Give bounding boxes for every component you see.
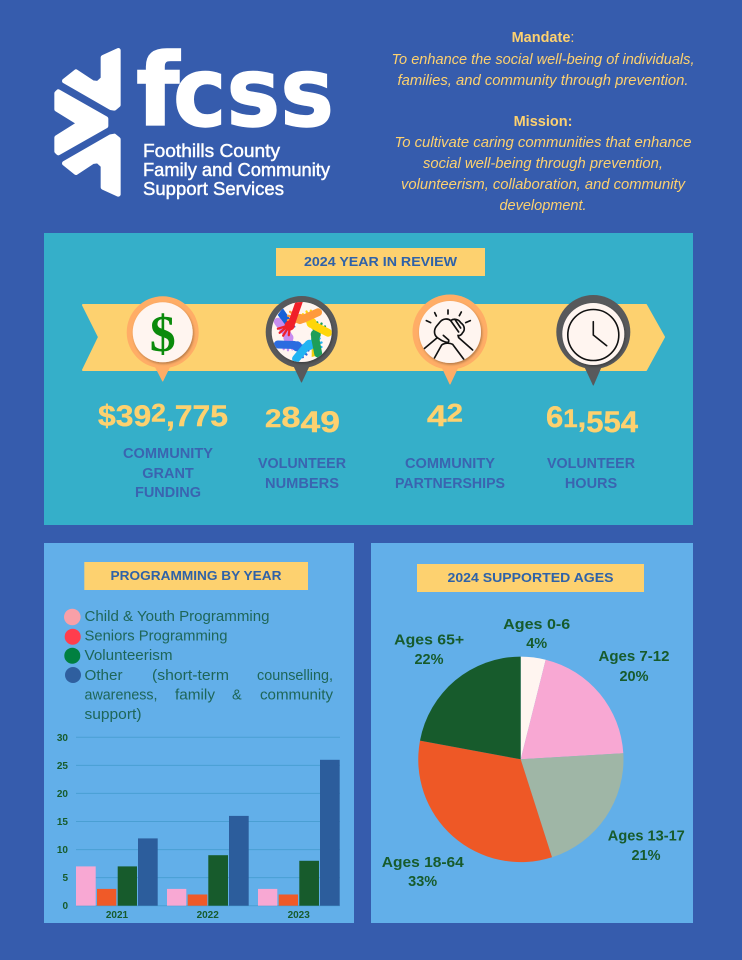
legend: Volunteerism	[84, 648, 172, 664]
y axis labels: 25	[57, 761, 68, 772]
y axis labels: 0	[62, 901, 68, 912]
x axis labels	[106, 910, 310, 921]
stat: community partnerships: 4	[427, 400, 444, 433]
legend: support)	[84, 707, 142, 723]
stat: grant funding: $39	[98, 400, 148, 433]
x axis labels: 2021	[106, 910, 129, 921]
pie label: ages 13-17	[608, 829, 685, 864]
pie label: ages 18-64: Ages 18-64	[382, 855, 464, 871]
stat: volunteer numbers: 49	[301, 406, 340, 439]
logo wordmark: f	[136, 32, 181, 149]
pie label: ages 13-17: Ages 13-17	[608, 829, 685, 845]
y axis labels: 15	[57, 817, 68, 828]
logo subtitle	[143, 141, 330, 199]
pie label: ages 65+: Ages 65+	[394, 633, 464, 649]
y axis labels: 20	[57, 789, 68, 800]
stat: volunteer hours: 61,	[546, 401, 586, 434]
mission heading: Mission:	[514, 114, 572, 130]
logo wordmark: css: css	[173, 36, 334, 148]
legend: awareness,	[84, 688, 158, 704]
bars: 2021	[76, 838, 158, 906]
pie label: ages 7-12: Ages 7-12	[598, 649, 670, 665]
legend: community	[260, 688, 334, 704]
icon: colourful hands pin	[266, 286, 338, 382]
stat: community partnerships	[395, 400, 505, 492]
pie label: ages 7-12: 20%	[619, 669, 649, 685]
stat: volunteer numbers	[258, 402, 347, 492]
stat: volunteer hours: VOLUNTEER	[547, 456, 636, 472]
y axis labels: 10	[57, 845, 68, 856]
stat: grant funding: GRANT	[142, 466, 194, 482]
stat: grant funding: COMMUNITY	[123, 446, 213, 462]
panel: 2024 year in review	[44, 233, 693, 525]
legend: &	[232, 688, 242, 704]
mission body	[394, 135, 692, 214]
stat: community partnerships: 2	[447, 400, 463, 428]
yellow ribbon	[83, 305, 664, 370]
mission body: development.	[500, 198, 586, 214]
icon: clock pin	[556, 295, 630, 385]
legend	[64, 609, 334, 723]
heading: year in review	[276, 248, 485, 276]
legend: counselling,	[257, 668, 333, 684]
bars: 2022	[167, 816, 249, 906]
bars: 2023	[258, 760, 340, 906]
stat: volunteer hours: HOURS	[565, 476, 618, 492]
stat: volunteer numbers: VOLUNTEER	[258, 456, 347, 472]
logo subtitle: Foothills County	[143, 141, 280, 161]
stat: volunteer numbers: NUMBERS	[265, 476, 339, 492]
legend: (short-term	[152, 668, 229, 684]
y axis labels: 30	[57, 733, 68, 744]
stat: community partnerships: PARTNERSHIPS	[395, 476, 505, 492]
pie label: ages 18-64	[382, 855, 464, 890]
heading: supported ages: 2024 SUPPORTED AGES	[448, 570, 614, 585]
heading: programming by year	[84, 562, 308, 590]
pie label: ages 0-6	[503, 617, 570, 652]
icon: dollar pin	[127, 296, 199, 381]
legend: family	[175, 688, 216, 704]
panel: programming by year	[44, 543, 354, 923]
pie label: ages 0-6: Ages 0-6	[503, 617, 570, 633]
x axis labels: 2023	[288, 910, 310, 921]
bar chart	[57, 733, 340, 921]
heading: programming by year: PROGRAMMING BY YEAR	[110, 568, 282, 583]
legend: Child & Youth Programming	[84, 609, 270, 625]
mission body: To cultivate caring communities that enhance	[394, 135, 692, 151]
stat: volunteer hours	[546, 401, 638, 492]
logo subtitle: Support Services	[143, 179, 284, 199]
heading: supported ages	[417, 564, 644, 592]
pie label: ages 13-17: 21%	[631, 848, 661, 864]
legend: Other	[84, 668, 123, 684]
stat: grant funding	[98, 400, 228, 501]
icon: handshake pin	[412, 294, 488, 384]
pie label: ages 18-64: 33%	[408, 874, 437, 890]
y axis labels: 5	[62, 873, 68, 884]
pie label: ages 7-12	[598, 649, 670, 685]
mandate body	[392, 52, 694, 89]
mandate and mission text	[392, 30, 694, 214]
mission body: volunteerism, collaboration, and community	[401, 177, 686, 193]
legend: Seniors Programming	[84, 629, 228, 645]
pie label: ages 65+	[394, 633, 464, 668]
stat: grant funding: FUNDING	[135, 485, 201, 501]
stat: community partnerships: COMMUNITY	[405, 456, 495, 472]
stat: grant funding: 2	[151, 400, 166, 428]
icon: FCSS snowflake mark	[57, 50, 118, 194]
pie label: ages 65+: 22%	[414, 652, 444, 668]
mandate body: To enhance the social well-being of individuals,	[392, 52, 694, 68]
icon: dollar pin: $	[150, 306, 176, 363]
panel: 2024 supported ages	[371, 543, 693, 923]
mandate body: families, and community through prevention.	[398, 73, 688, 89]
pie chart	[418, 657, 623, 862]
y axis labels	[57, 733, 68, 912]
logo subtitle: Family and Community	[143, 160, 330, 180]
heading: year in review: 2024 YEAR IN REVIEW	[304, 254, 458, 269]
logo: FCSS	[57, 32, 334, 199]
stat: volunteer hours: 554	[586, 406, 638, 439]
stat: volunteer numbers: 28	[265, 402, 298, 434]
mandate heading: Mandate:	[512, 30, 574, 46]
pie label: ages 0-6: 4%	[526, 636, 547, 652]
x axis labels: 2022	[197, 910, 219, 921]
mission body: social well-being through prevention,	[423, 156, 663, 172]
stat: grant funding: ,775	[166, 400, 228, 433]
